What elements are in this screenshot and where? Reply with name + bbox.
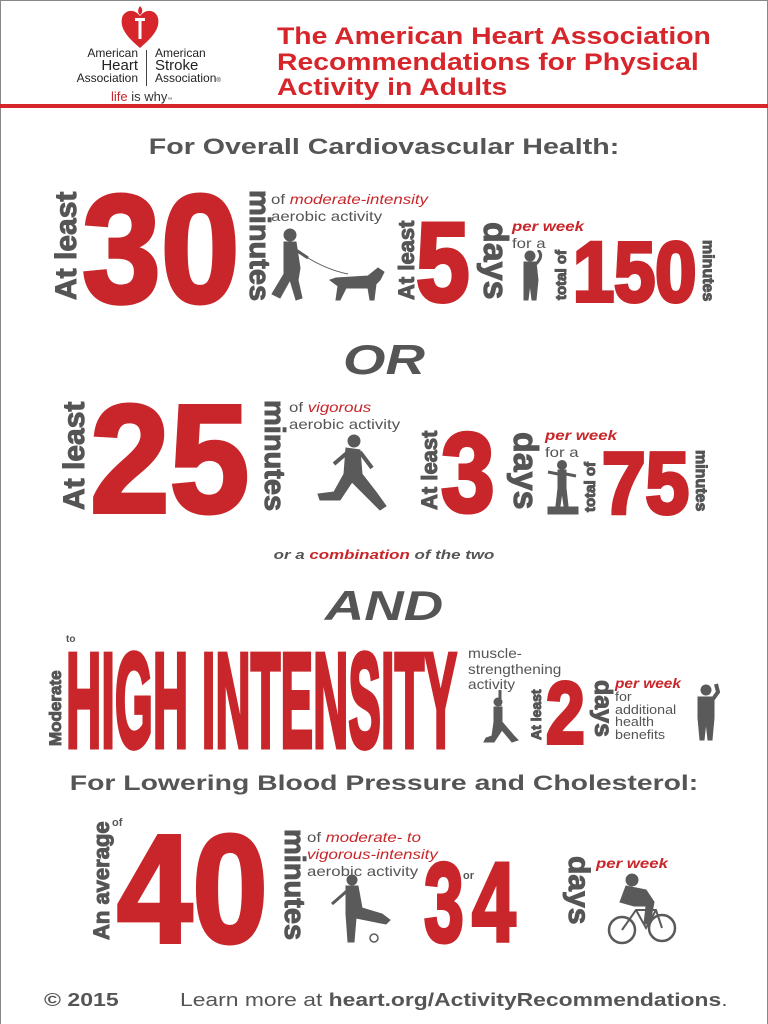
title: Activity in Adults [277, 74, 507, 101]
text additional benefits: per week [615, 675, 681, 691]
icon: walker with dog [271, 228, 385, 301]
label moderate: Moderate [46, 670, 65, 746]
heading HIGH INTENSITY: HIGH INTENSITY [66, 625, 457, 776]
text moderate to vigorous: aerobic activity [307, 863, 418, 879]
logo text right: American [155, 46, 206, 60]
label minutes small: minutes [692, 450, 709, 511]
label days: days [476, 222, 514, 300]
text vigorous: of vigorous [289, 399, 371, 415]
text muscle strengthening: activity [468, 676, 515, 692]
title: Recommendations for Physical [277, 48, 699, 76]
text per week: per week [596, 855, 668, 871]
label minutes: minutes [278, 829, 310, 940]
icon: stretching woman [524, 250, 542, 300]
logo text left [76, 46, 138, 85]
text vigorous [289, 399, 400, 432]
header logo [76, 6, 221, 104]
label: at least: At least [50, 192, 83, 300]
note: combination: or a combination of the two [274, 547, 494, 562]
icon: flexing man [698, 684, 720, 740]
number 5: 5 [416, 200, 470, 325]
label minutes small: minutes [699, 240, 716, 301]
number 150: 150 [573, 225, 696, 319]
label at least 2: At least [528, 689, 544, 740]
text per week [544, 427, 618, 460]
text moderate: aerobic activity [271, 208, 382, 224]
header rule [0, 104, 768, 108]
label total of: total of [582, 462, 599, 512]
heading: cardiovascular: For Overall Cardiovascular Health: [149, 134, 619, 159]
text moderate to vigorous: of moderate- to [307, 829, 421, 845]
connector AND: AND [325, 582, 443, 629]
text muscle strengthening [468, 645, 561, 692]
label total of: total of [553, 250, 570, 300]
number 4: 4 [472, 840, 516, 965]
text per week: for a [545, 444, 579, 460]
text moderate to vigorous: vigorous-intensity [307, 846, 438, 862]
logo text left: Association [77, 71, 138, 85]
number 40: 40 [117, 803, 268, 975]
icon: cyclist [608, 874, 676, 944]
text muscle strengthening: muscle- [468, 645, 522, 661]
label at least 25: At least [58, 402, 91, 510]
logo text right: Stroke [155, 56, 198, 74]
label days: days [506, 432, 544, 510]
label days: days [589, 680, 617, 737]
text additional benefits: additional [615, 702, 676, 717]
label to: to [66, 634, 75, 645]
title [277, 23, 711, 101]
label of: of [112, 817, 122, 829]
icon: stepper figure [548, 460, 578, 514]
text additional benefits: health [615, 714, 654, 729]
text muscle strengthening: strengthening [468, 660, 561, 676]
label at least 3: At least [417, 431, 442, 510]
text per week: for a [512, 235, 546, 251]
icon: lunge figure [483, 690, 519, 743]
text additional benefits: for [615, 689, 632, 704]
text vigorous: aerobic activity [289, 416, 400, 432]
text per week [512, 218, 584, 251]
text per week: per week [512, 218, 584, 234]
label minutes: minutes [258, 400, 290, 511]
label days: days [562, 856, 595, 924]
icon: soccer player [331, 874, 391, 943]
label at least 5: At least [394, 221, 419, 300]
title: The American Heart Association [277, 23, 711, 50]
logo text right: Association® [155, 71, 221, 85]
number 3: 3 [424, 840, 464, 965]
number 30: 30 [82, 163, 240, 335]
text additional benefits [614, 675, 682, 742]
label an average: An average [89, 821, 114, 940]
number 3: 3 [441, 410, 495, 535]
number 25: 25 [90, 373, 249, 545]
number 2: 2 [546, 665, 585, 762]
logo text left: Heart [101, 56, 138, 74]
heading: blood pressure: For Lowering Blood Pressure and Cholesterol: [70, 772, 698, 795]
text moderate to vigorous [307, 829, 438, 879]
number 75: 75 [602, 435, 689, 532]
label minutes: minutes [243, 190, 275, 301]
label or: or [463, 870, 474, 882]
logo text right [155, 46, 221, 85]
icon: heart and torch [122, 6, 158, 48]
connector OR: OR [343, 336, 425, 383]
icon: runner [317, 434, 387, 511]
text moderate [271, 191, 429, 224]
logo text left: American [87, 46, 138, 60]
text additional benefits: benefits [615, 727, 665, 742]
text per week: per week [545, 427, 617, 443]
text moderate: of moderate-intensity [271, 191, 428, 207]
footer copyright: © 2015 [44, 990, 119, 1010]
footer link: Learn more at heart.org/ActivityRecommendations. [180, 990, 728, 1010]
tagline: life is why™ [111, 89, 172, 104]
